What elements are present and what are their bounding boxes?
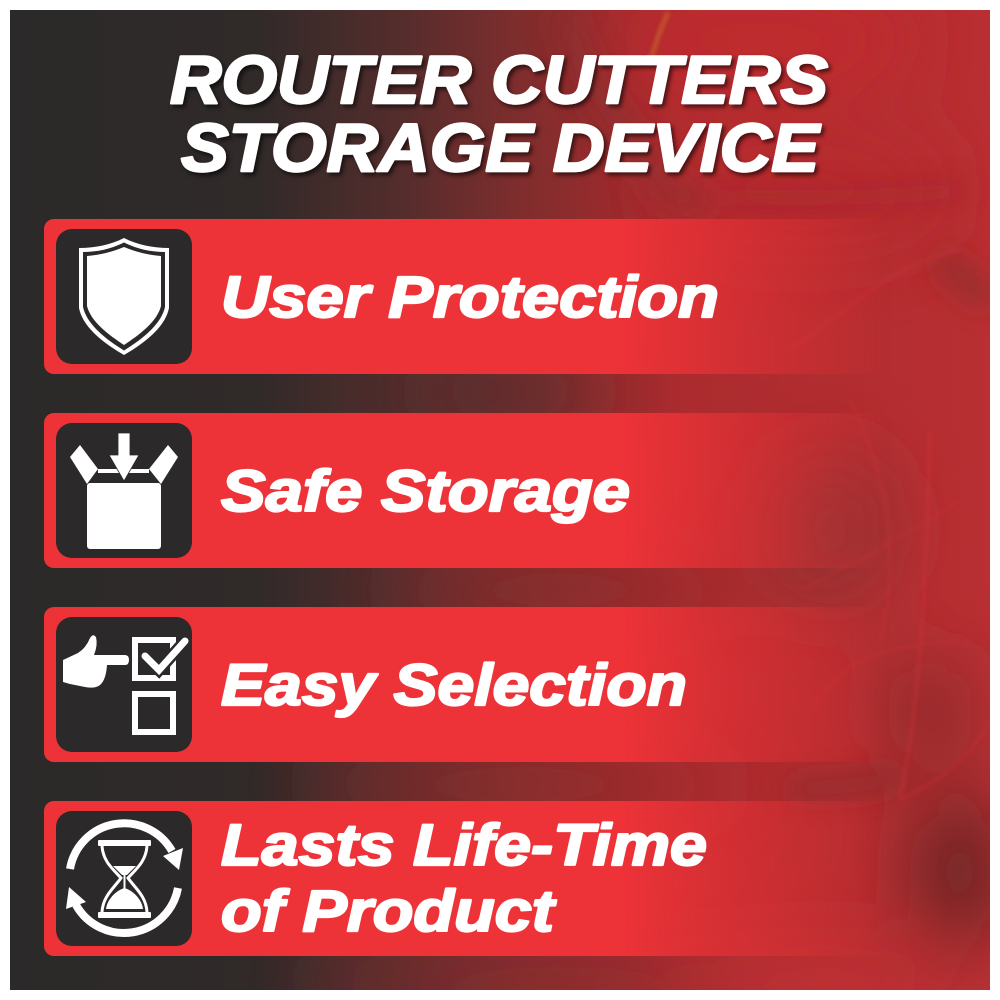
icon tile: hand and checkboxes bbox=[56, 617, 192, 752]
label: lasts life-time: Lasts Life-Time bbox=[221, 813, 707, 878]
title: STORAGE DEVICE bbox=[181, 110, 822, 186]
panel: safe storage bbox=[44, 413, 890, 568]
label: user protection: User Protection bbox=[221, 265, 719, 330]
icon tile: box with arrow bbox=[56, 423, 192, 558]
panel: easy selection bbox=[44, 607, 890, 762]
title: ROUTER CUTTERS bbox=[170, 42, 828, 118]
label: easy selection: Easy Selection bbox=[221, 653, 687, 718]
label: safe storage: Safe Storage bbox=[221, 459, 630, 524]
title bbox=[170, 42, 828, 186]
label: of product: of Product bbox=[221, 879, 557, 944]
icon tile: hourglass with cycle arrows bbox=[56, 811, 192, 946]
icon tile: shield bbox=[56, 229, 192, 364]
panel: lasts life-time of product bbox=[44, 801, 890, 956]
panel: user protection bbox=[44, 219, 890, 374]
